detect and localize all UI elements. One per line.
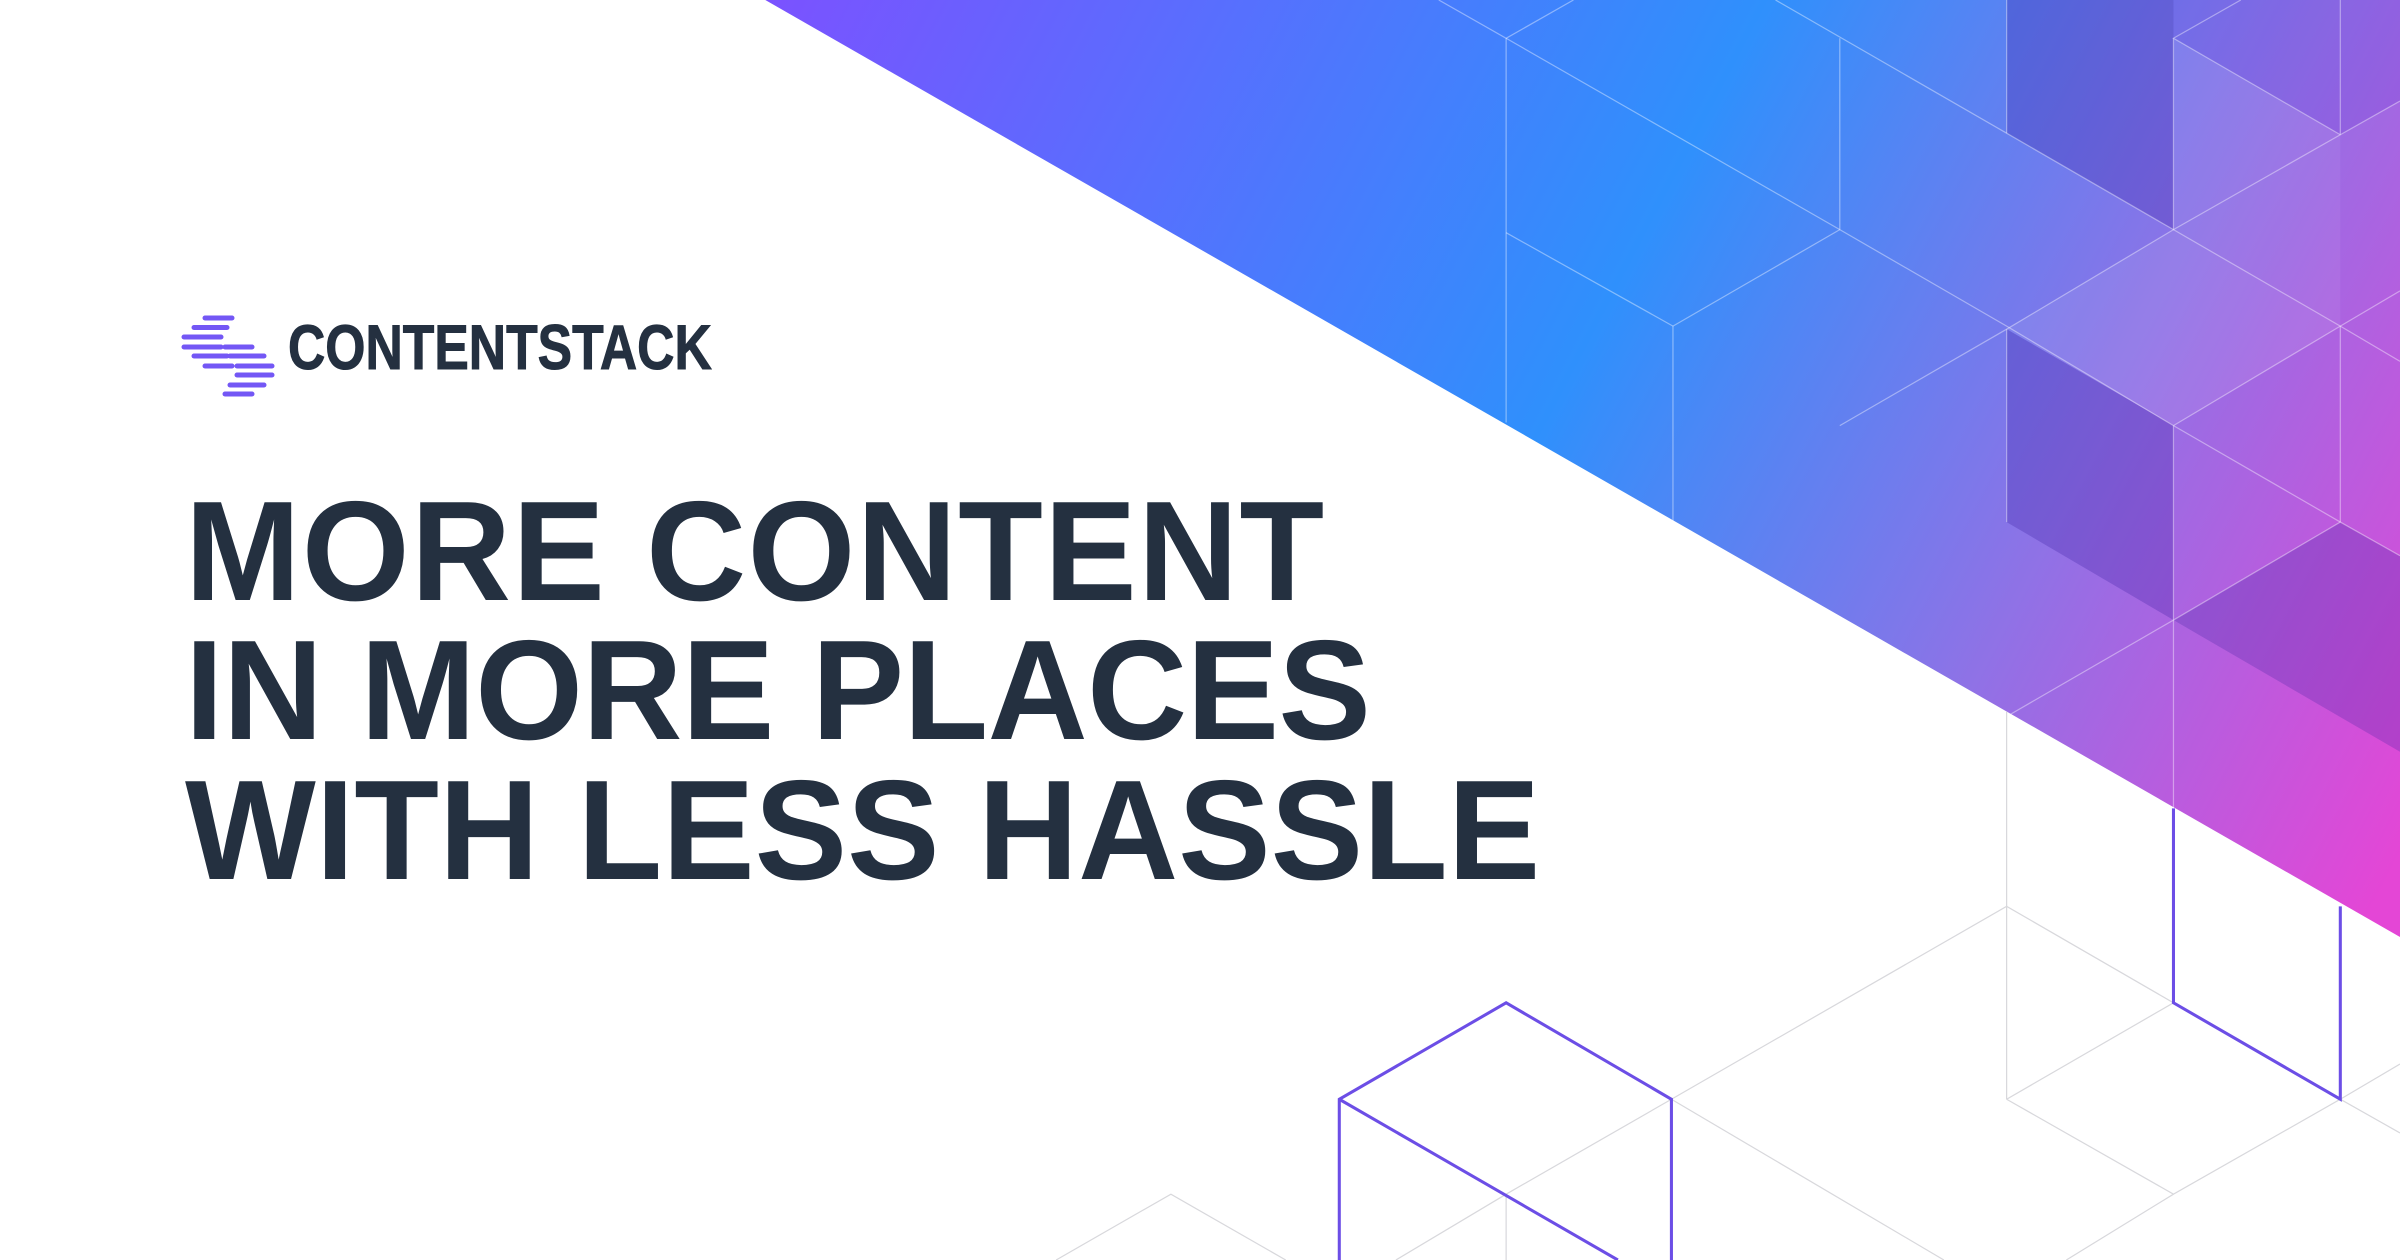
title line 1: MORE CONTENT <box>185 472 1326 631</box>
title line 2: IN MORE PLACES <box>185 611 1370 770</box>
logo wordmark: CONTENTSTACK <box>288 313 712 383</box>
logo: contentstack <box>182 313 712 396</box>
title line 3: WITH LESS HASSLE <box>185 751 1540 910</box>
title <box>185 472 1540 910</box>
icon: stacked bars <box>182 316 274 396</box>
grey line grid <box>1056 712 2400 1260</box>
purple cube outlines <box>1339 808 2340 1260</box>
